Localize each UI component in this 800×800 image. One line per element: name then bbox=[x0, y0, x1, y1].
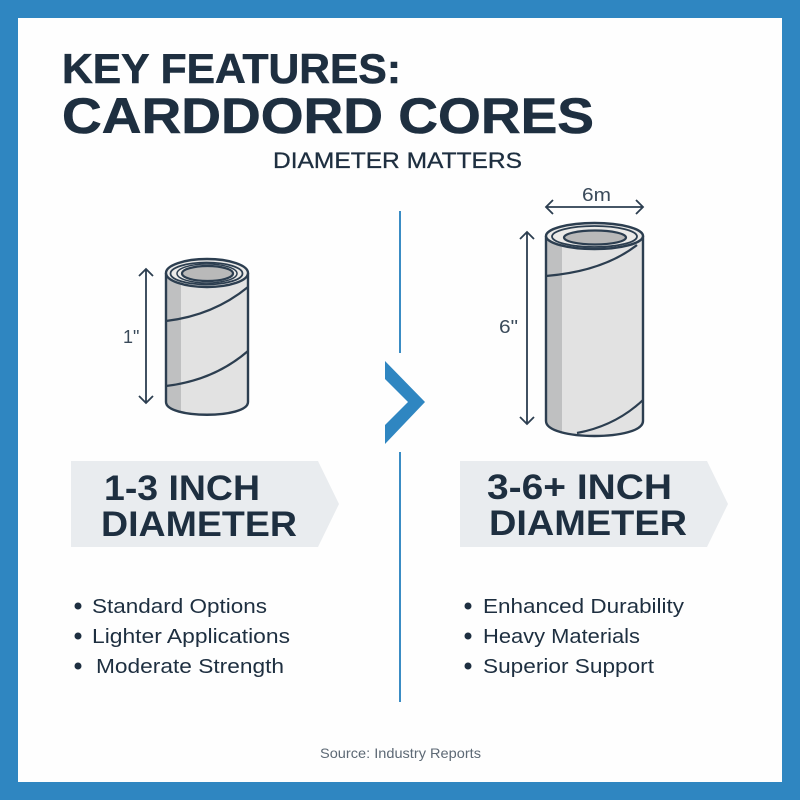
small core illustration bbox=[123, 259, 248, 415]
large core width label: 6m bbox=[582, 185, 611, 205]
right bullet list: Heavy Materials bbox=[483, 626, 640, 648]
large core top rim bbox=[546, 223, 643, 249]
large core height label: 6" bbox=[499, 317, 518, 337]
left bullet list: Moderate Strength bbox=[96, 656, 284, 678]
large core body bbox=[546, 236, 643, 436]
small core outline bbox=[166, 273, 248, 415]
right bullet list: Enhanced Durability bbox=[483, 596, 684, 618]
large core illustration bbox=[499, 185, 643, 436]
small core spiral lines bbox=[166, 287, 248, 386]
large core shaded side bbox=[546, 236, 562, 433]
left bullet list bbox=[74, 596, 290, 678]
right banner bbox=[460, 461, 728, 547]
center divider bbox=[399, 211, 401, 702]
right banner: DIAMETER bbox=[489, 504, 687, 543]
left banner: DIAMETER bbox=[101, 505, 297, 544]
left bullet list: Lighter Applications bbox=[92, 626, 290, 648]
title line 1: KEY FEATURES: bbox=[62, 45, 401, 92]
large core outline bbox=[546, 236, 643, 436]
left banner text: 1-3 INCH bbox=[104, 469, 260, 508]
left banner bbox=[71, 461, 339, 547]
arrow chevron bbox=[385, 361, 425, 444]
small core label: 1" bbox=[123, 327, 139, 347]
large core height arrow bbox=[520, 232, 534, 424]
subtitle: DIAMETER MATTERS bbox=[273, 148, 522, 173]
small core height arrow bbox=[139, 269, 153, 403]
title line 2: CARDDORD CORES bbox=[62, 88, 594, 144]
left bullet list: Standard Options bbox=[92, 596, 267, 618]
right banner text: 3-6+ INCH bbox=[487, 468, 672, 507]
right bullet list: Superior Support bbox=[483, 656, 654, 678]
small core body bbox=[166, 273, 248, 415]
right bullet list bbox=[464, 596, 684, 678]
source note: Source: Industry Reports bbox=[320, 745, 481, 761]
small core top rim bbox=[166, 259, 248, 287]
small core shaded side bbox=[166, 273, 181, 412]
large core spiral lines bbox=[546, 245, 643, 433]
large core width arrow bbox=[546, 200, 643, 214]
